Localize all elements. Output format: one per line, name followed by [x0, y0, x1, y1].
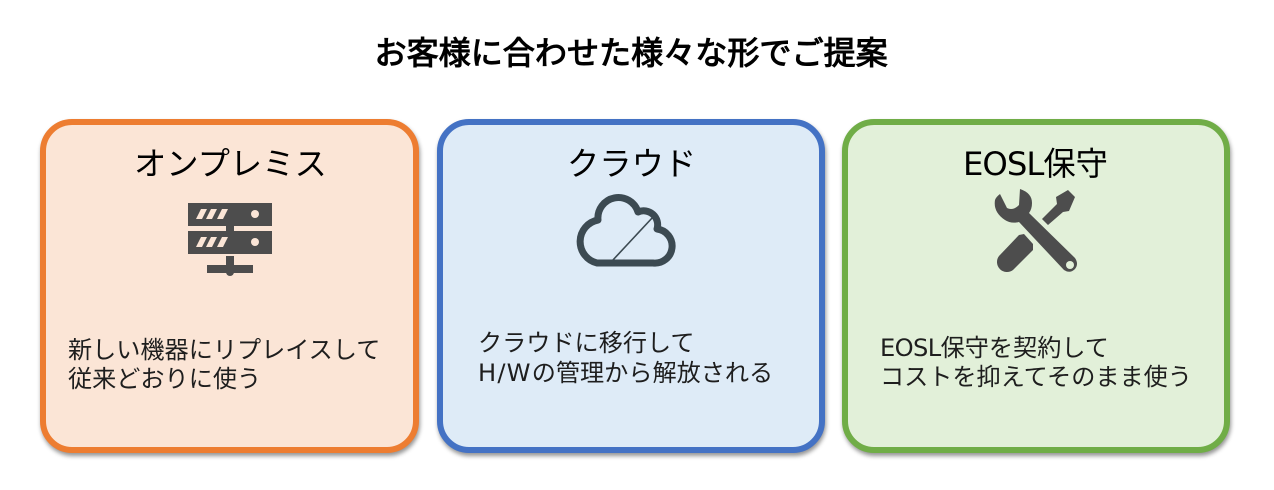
body text: cloud: クラウドに移行して	[478, 329, 695, 357]
panel: on-premises	[40, 119, 419, 453]
icon: wrench and screwdriver	[994, 189, 1077, 272]
body text: EOSL maintenance	[880, 334, 1192, 391]
icon: server	[188, 203, 272, 276]
body text: EOSL maintenance: コストを抑えてそのまま使う	[880, 363, 1192, 391]
title: お客様に合わせた様々な形でご提案	[374, 34, 888, 72]
panel: cloud	[437, 119, 825, 453]
heading: on-premises: オンプレミス	[134, 145, 327, 183]
body text: on-premises: 従来どおりに使う	[68, 365, 261, 393]
panel: EOSL maintenance	[842, 119, 1230, 453]
heading: EOSL maintenance: EOSL保守	[963, 145, 1108, 183]
body text: EOSL maintenance: EOSL保守を契約して	[880, 334, 1109, 362]
body text: cloud	[478, 329, 773, 386]
icon: cloud	[576, 194, 676, 267]
heading: cloud: クラウド	[567, 145, 696, 183]
body text: on-premises: 新しい機器にリプレイスして	[68, 336, 380, 364]
body text: on-premises	[68, 336, 380, 393]
body text: cloud: H/Wの管理から解放される	[478, 358, 773, 386]
